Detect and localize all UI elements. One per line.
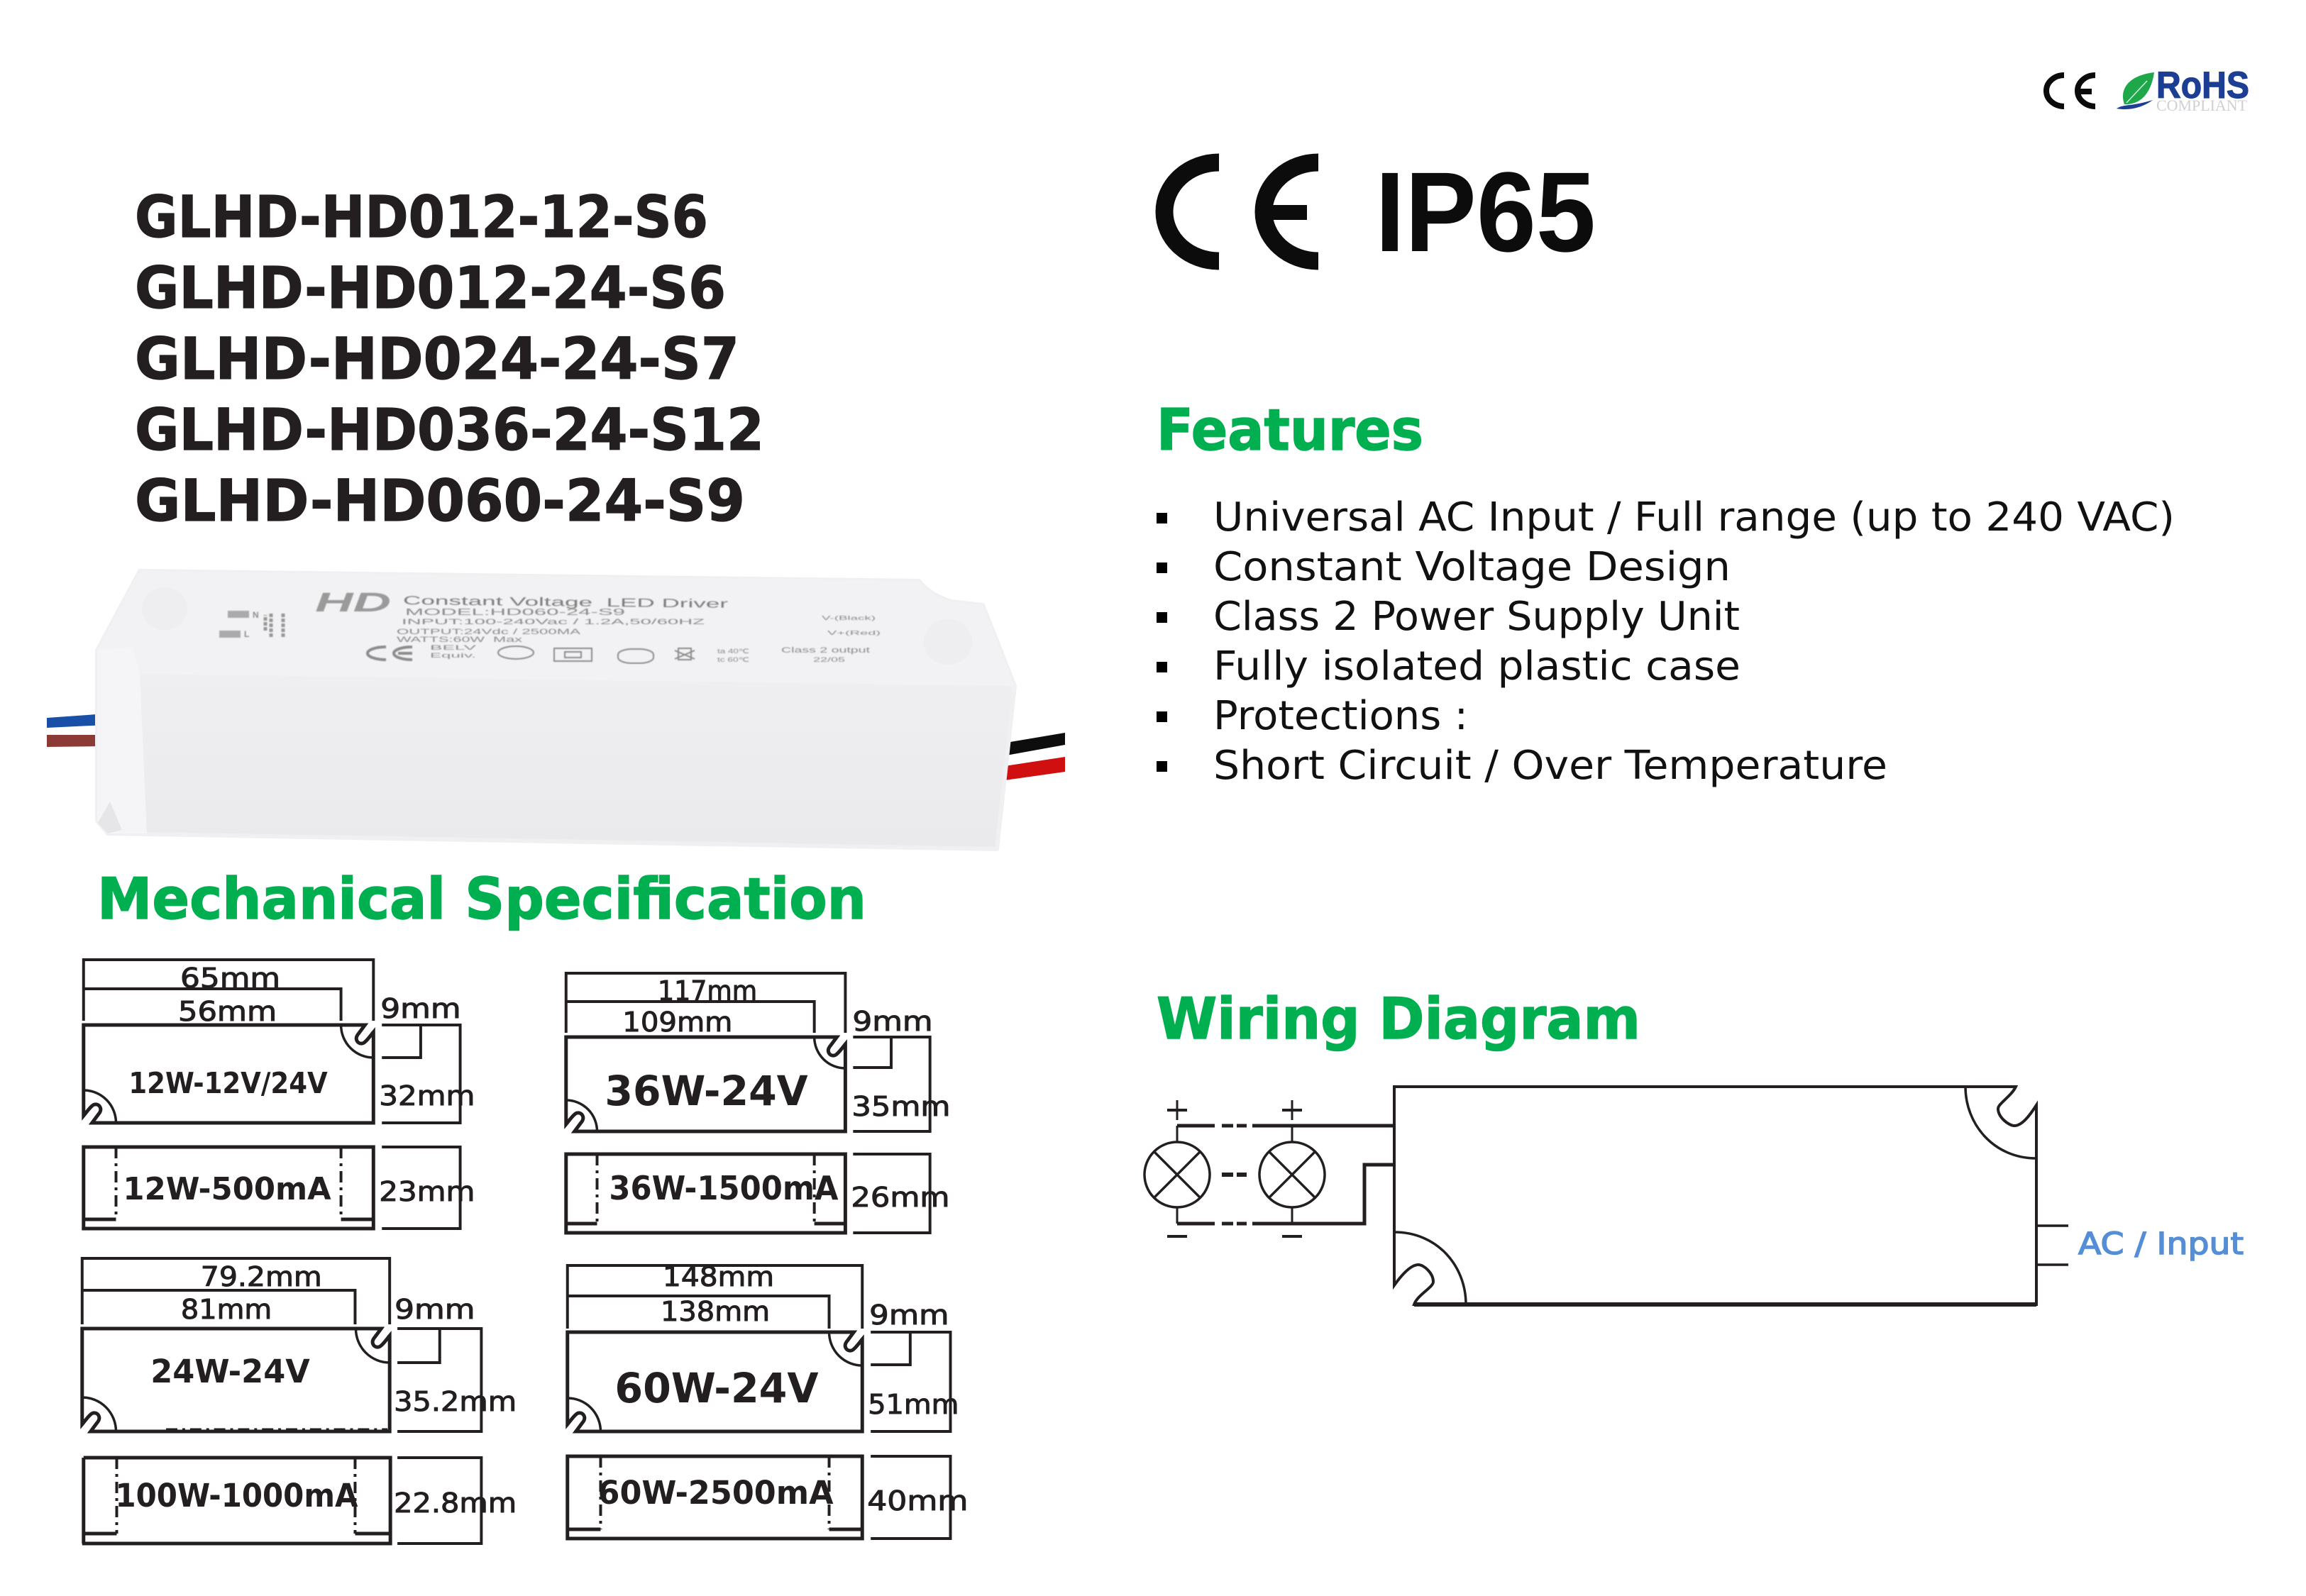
dimension labels: 148mm xyxy=(663,1261,774,1292)
icon: large CE mark xyxy=(1164,162,1318,261)
dimension labels xyxy=(178,963,475,1207)
model labels xyxy=(605,1067,839,1207)
compliant wordmark: COMPLIANT xyxy=(2156,96,2248,114)
driver label text: INPUT:100-240Vac / 1.2A,50/60HZ xyxy=(402,618,705,626)
panel: 36W dimension drawing xyxy=(566,973,951,1233)
driver corner arcs xyxy=(1394,1087,2036,1304)
side dimensions xyxy=(397,1458,481,1544)
dimension labels: 23mm xyxy=(379,1176,475,1207)
model labels: 24W-24V xyxy=(150,1353,310,1390)
driver label text: V+(Red) xyxy=(827,630,881,636)
panel: 60W dimension drawing xyxy=(568,1261,968,1539)
top view outline xyxy=(568,1332,862,1431)
panel: 24W dimension drawing xyxy=(82,1258,517,1544)
model number title: GLHD-HD012-24-S6 xyxy=(135,255,726,322)
model number title: GLHD-HD060-24-S9 xyxy=(135,468,745,535)
bottom hidden line xyxy=(166,1429,387,1430)
side dimensions xyxy=(871,1456,951,1539)
dimension lines xyxy=(568,1265,951,1431)
dimension labels: 138mm xyxy=(661,1296,770,1327)
driver label text: Class 2 output xyxy=(781,646,870,655)
features list: Constant Voltage Design xyxy=(1213,544,1731,590)
panel: 12W dimension drawing xyxy=(84,960,475,1229)
driver label text: 22/05 xyxy=(813,656,845,663)
model labels: 60W-24V xyxy=(614,1364,819,1412)
driver label text: OUTPUT:24Vdc / 2500MA xyxy=(397,628,581,636)
side view box xyxy=(82,1458,390,1544)
input wires xyxy=(47,714,109,747)
top view outline xyxy=(84,1025,373,1123)
features list: Fully isolated plastic case xyxy=(1213,643,1740,689)
icon: RoHS leaf xyxy=(2117,72,2154,109)
dimension labels: 56mm xyxy=(178,996,277,1027)
dimension labels: 9mm xyxy=(869,1299,949,1331)
model labels: 36W-24V xyxy=(605,1067,808,1115)
AC input terminals xyxy=(2036,1226,2068,1265)
corner arcs xyxy=(568,1332,862,1431)
driver label text: BELV xyxy=(430,644,476,651)
model labels xyxy=(123,1066,331,1207)
dimension lines xyxy=(82,1258,481,1431)
product photo: LED driver xyxy=(47,571,1065,849)
driver label text: MODEL:HD060-24-S9 xyxy=(405,606,625,617)
model number title: GLHD-HD012-12-S6 xyxy=(135,184,708,251)
dimension labels xyxy=(181,1261,517,1519)
dimension labels: 35.2mm xyxy=(394,1386,517,1417)
dimension labels: 9mm xyxy=(852,1006,933,1037)
certification logos top right xyxy=(2046,65,2249,114)
model labels xyxy=(598,1364,834,1512)
corner arcs xyxy=(82,1329,390,1431)
AC input label: AC / Input xyxy=(2078,1226,2244,1262)
model labels: 36W-1500mA xyxy=(609,1169,839,1207)
corner arcs xyxy=(566,1037,845,1131)
side view hidden lines xyxy=(600,1456,829,1529)
corner arcs xyxy=(84,1025,373,1123)
dimension labels: 65mm xyxy=(180,963,280,994)
features list: Short Circuit / Over Temperature xyxy=(1213,743,1887,789)
driver label text xyxy=(219,588,881,663)
side view hidden lines xyxy=(597,1154,815,1224)
driver bottom edge xyxy=(1414,1302,2036,1307)
driver label text: L xyxy=(244,629,249,639)
dimension labels: 109mm xyxy=(622,1007,732,1038)
driver outline xyxy=(1394,1087,2036,1304)
driver label text: HD xyxy=(315,588,391,618)
driver label text: Equiv. xyxy=(430,652,476,659)
dimension labels: 9mm xyxy=(380,993,461,1024)
side view box xyxy=(568,1456,862,1539)
icon: lamp 2 xyxy=(1259,1142,1325,1207)
top view outline xyxy=(82,1329,390,1431)
icon: small CE mark xyxy=(2046,75,2095,106)
dimension labels: 117mm xyxy=(658,975,757,1007)
dimension labels: 35mm xyxy=(851,1091,951,1122)
dimension labels: 40mm xyxy=(867,1485,968,1517)
top view outline xyxy=(566,1037,845,1131)
driver label text: V-(Black) xyxy=(822,615,876,621)
model labels xyxy=(116,1353,358,1514)
wiring diagram heading: Wiring Diagram xyxy=(1157,986,1640,1052)
side view box xyxy=(84,1147,373,1229)
side view hidden lines xyxy=(116,1147,341,1219)
features list xyxy=(1157,494,2175,789)
dimension labels xyxy=(661,1261,968,1517)
dimension labels: 51mm xyxy=(868,1389,959,1420)
dimension labels: 9mm xyxy=(395,1294,475,1325)
features list: Protections : xyxy=(1213,693,1468,739)
features heading: Features xyxy=(1157,397,1423,463)
dimension labels: 26mm xyxy=(851,1182,950,1213)
model number title: GLHD-HD036-24-S12 xyxy=(135,397,764,464)
side view box xyxy=(566,1154,845,1233)
dimension labels: 22.8mm xyxy=(394,1487,517,1519)
IP65 rating: IP65 xyxy=(1375,148,1596,275)
dimension labels: 32mm xyxy=(379,1080,475,1112)
features list: Universal AC Input / Full range (up to 240 VAC) xyxy=(1213,494,2175,541)
RoHS wordmark: RoHS xyxy=(2156,65,2249,106)
model number title xyxy=(135,184,764,535)
driver label certification icons xyxy=(368,646,695,663)
dimension lines xyxy=(84,960,460,1123)
driver housing xyxy=(97,571,1015,849)
icon: lamp 1 xyxy=(1144,1142,1210,1207)
model labels: 12W-500mA xyxy=(123,1171,331,1207)
dimension labels: 81mm xyxy=(181,1294,272,1325)
model labels: 12W-12V/24V xyxy=(128,1066,328,1100)
certification: CE IP65 xyxy=(1164,148,1596,275)
list bullets xyxy=(1157,513,1167,772)
dimension lines xyxy=(566,973,930,1131)
dimension labels: 79.2mm xyxy=(201,1261,322,1292)
polarity marks xyxy=(1167,1100,1302,1236)
lamp wiring xyxy=(1177,1126,1394,1224)
mechanical specification heading: Mechanical Specification xyxy=(97,866,866,932)
side view hidden lines xyxy=(116,1458,355,1534)
driver label text: ta 40℃ xyxy=(717,648,749,655)
driver label text: Constant Voltage LED Driver xyxy=(403,594,729,611)
features list: Class 2 Power Supply Unit xyxy=(1213,594,1740,640)
model number title: GLHD-HD024-24-S7 xyxy=(135,326,739,393)
driver label text: WATTS:60W Max xyxy=(397,636,523,644)
dimension labels xyxy=(622,975,951,1213)
side dimensions xyxy=(382,1147,460,1229)
model labels: 100W-1000mA xyxy=(116,1477,358,1514)
driver label text: N xyxy=(253,610,259,620)
driver label text: tc 60℃ xyxy=(717,656,749,663)
output wires xyxy=(1005,733,1065,780)
wiring diagram xyxy=(1144,1087,2244,1304)
model labels: 60W-2500mA xyxy=(598,1474,834,1512)
side dimensions xyxy=(853,1154,930,1233)
